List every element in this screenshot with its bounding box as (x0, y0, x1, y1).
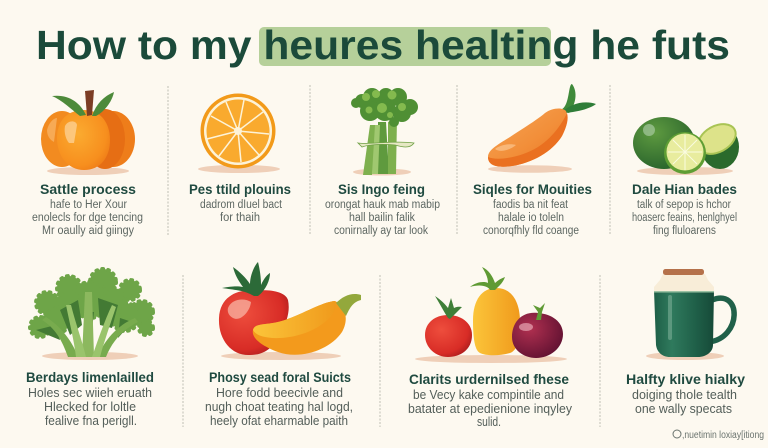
icon: green mug (646, 269, 734, 360)
text block: orongat hauk mab mabip (325, 199, 440, 211)
text block: hall bailin falik (349, 212, 415, 224)
text block (205, 385, 353, 428)
text block: halale io toleln (498, 212, 564, 224)
title: How to my heures healting he futs (36, 22, 730, 68)
heading: Pes ttild plouins (189, 182, 291, 197)
text block (483, 199, 579, 237)
heading: Sis Ingo feing (338, 182, 425, 197)
text block (32, 199, 143, 237)
panel: orange (189, 94, 291, 224)
text block: dadrom dIuel bact (200, 199, 283, 211)
text block (632, 199, 737, 237)
text block: conirnally ay tar look (334, 225, 428, 237)
panel: mug (626, 269, 746, 416)
icon: apple and banana (219, 262, 361, 360)
panel: three fruits (408, 267, 573, 429)
text block: sulid. (477, 414, 501, 429)
text block (28, 385, 152, 428)
text block: nugh choat teating hal logd, (205, 399, 353, 414)
text block: Hlecked for loltle (44, 399, 136, 414)
text block: one wally specats (635, 401, 732, 416)
text block: faodis ba nit feat (493, 199, 569, 211)
heading: Berdays limenlailled (26, 370, 154, 385)
text block (408, 387, 573, 429)
panel: carrot (473, 84, 596, 237)
text block: talk of sepop is hchor (637, 199, 731, 211)
heading: Clarits urdernilsed fhese (409, 372, 569, 387)
icon: orange slice (198, 94, 280, 173)
text block: for thaih (220, 212, 260, 224)
icon: leafy greens (30, 269, 153, 360)
title highlight (259, 27, 551, 66)
text block: hoaserc feains, henlghyel (632, 212, 737, 224)
text block: Holes sec wiieh eruath (28, 385, 152, 400)
heading: Dale Hian bades (632, 182, 737, 197)
text block: Mr oaully aid giingy (42, 225, 134, 237)
text block: Hore fodd beecivle and (216, 385, 343, 400)
panel: apple and banana (205, 262, 361, 428)
text block (325, 199, 440, 237)
icon: pumpkin (41, 90, 135, 175)
text block: be Vecy kake compintile and (413, 387, 564, 402)
text block: hafe to Her Xour (50, 199, 127, 211)
text block: fealive fna perigll. (45, 413, 137, 428)
text block: doiging thole tealth (632, 387, 737, 402)
text block (200, 199, 283, 224)
heading: Siqles for Mouities (473, 182, 592, 197)
icon: limes (633, 117, 742, 175)
icon: broccoli bundle (351, 88, 418, 176)
icon: carrot (488, 84, 596, 173)
heading: Phosy sead foral Suicts (209, 370, 351, 385)
icon: tomato, squash and plum (415, 267, 567, 363)
text block: heely ofat eharmable paith (210, 413, 348, 428)
panel: broccoli bundle (325, 88, 440, 237)
text block: fing fluloarens (653, 225, 716, 237)
heading: Sattle process (40, 182, 136, 197)
heading: Halfty klive hialky (626, 372, 746, 387)
panel: limes (632, 117, 742, 237)
text block (632, 387, 737, 416)
panel: parsley (26, 269, 154, 428)
text block: batater at epedienione inqyley (408, 401, 573, 416)
text block: conorqfhly fld coange (483, 225, 579, 237)
text block: enolecls for dge tencing (32, 212, 143, 224)
panel: pumpkin (32, 90, 143, 237)
